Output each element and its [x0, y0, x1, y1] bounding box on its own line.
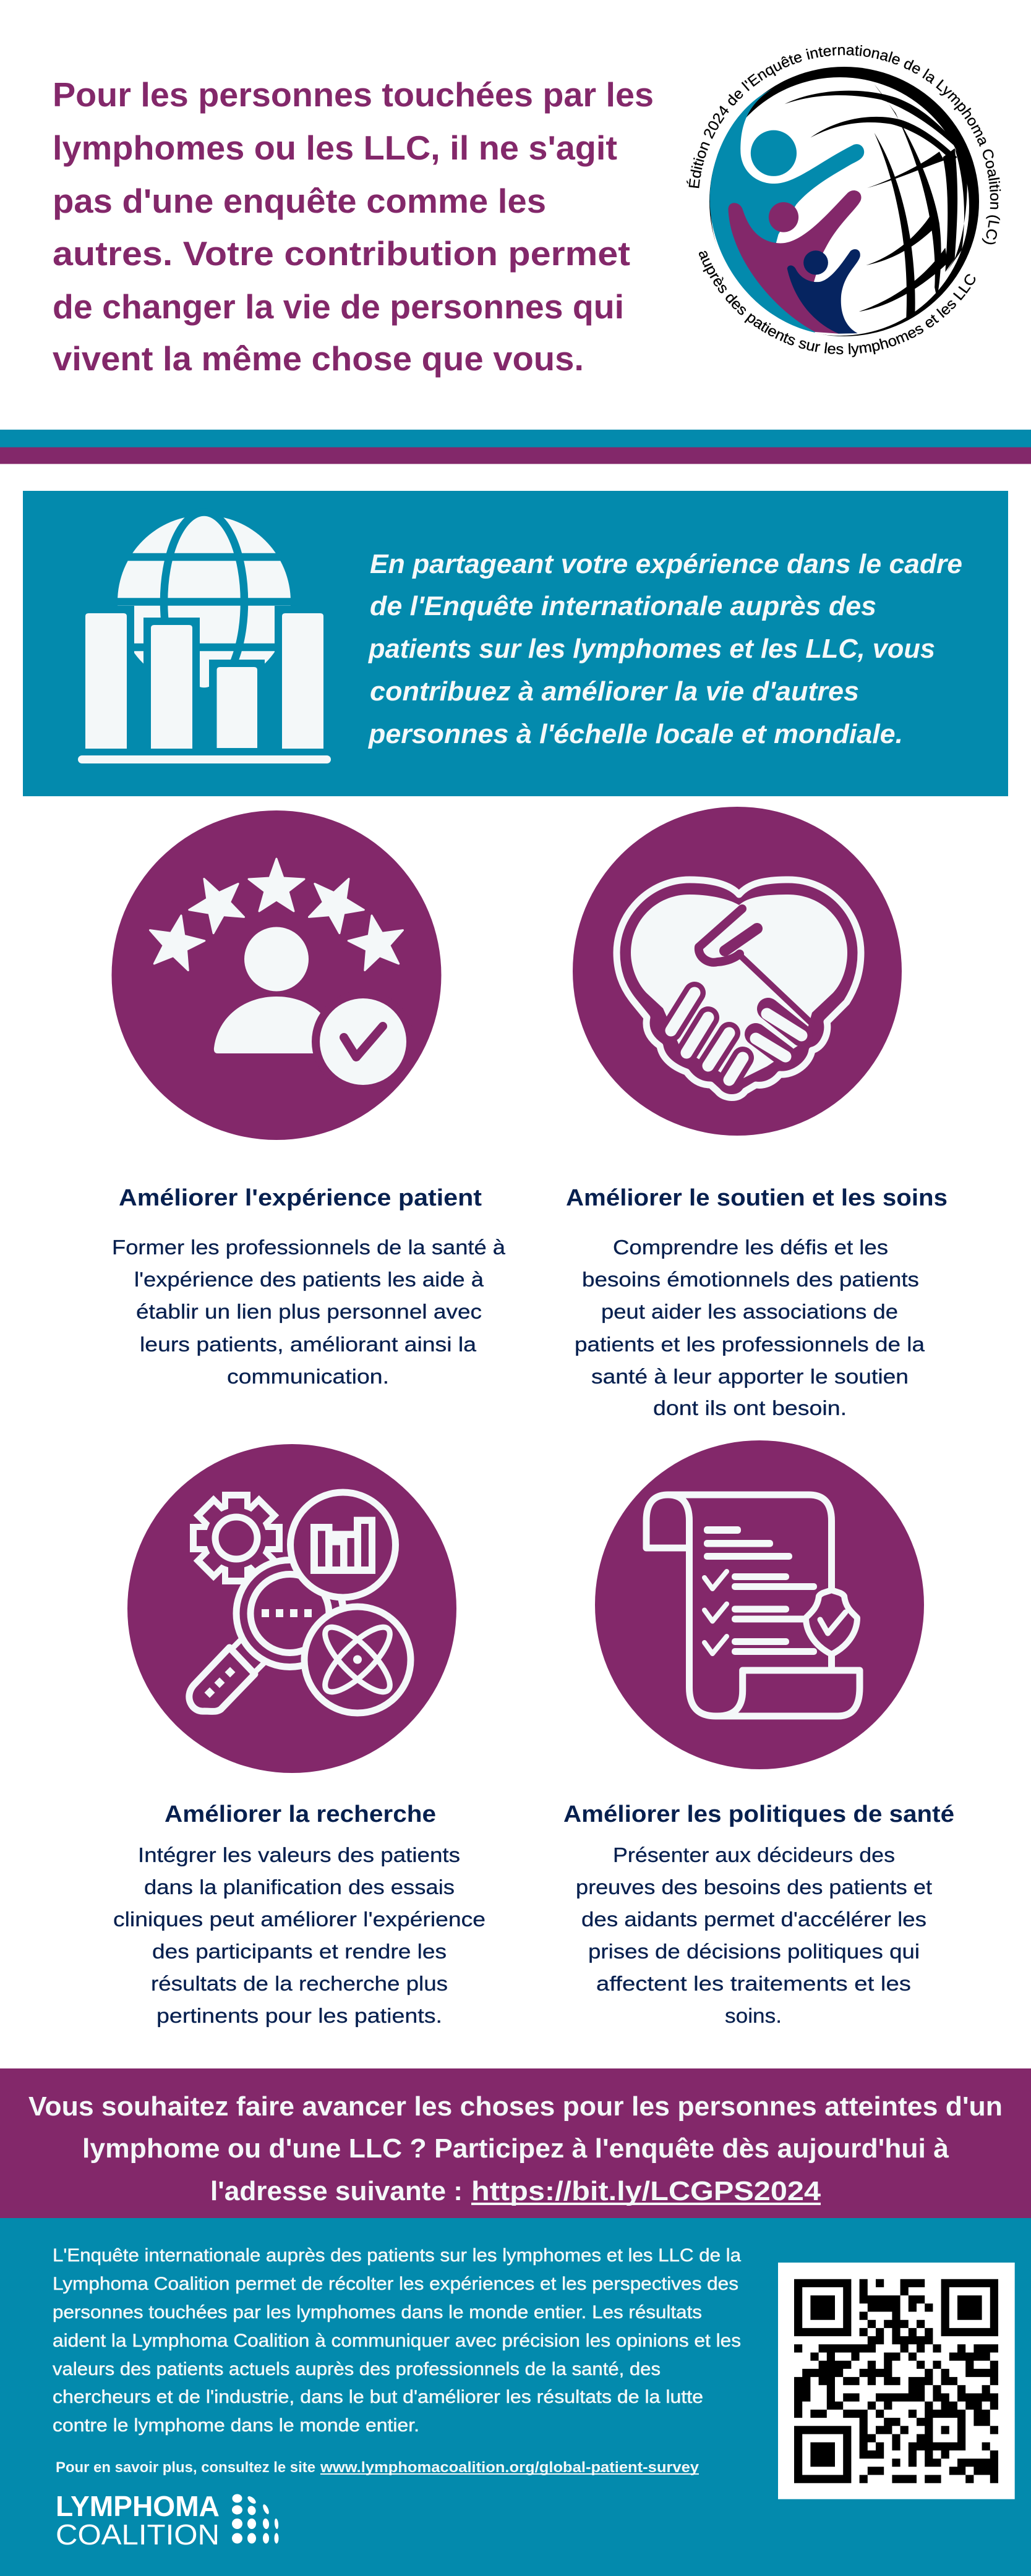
more info link: www.lymphomacoalition.org/global-patient-survey: [320, 2459, 699, 2476]
banner text: patients sur les lymphomes et les LLC, vous: [368, 634, 935, 664]
thumb and hand divider: [699, 909, 811, 1023]
footer text: contre le lymphome dans le monde entier.: [53, 2415, 419, 2436]
icon: globe with bars: [78, 512, 331, 763]
Lymphoma Coalition logo: [56, 2490, 279, 2551]
card text: l'expérience des patients les aide à: [134, 1268, 484, 1291]
icon: research magnifier: [127, 1444, 456, 1773]
badge curved text: Édition 2024 de l'Enquête internationale de la Lymphoma Coalition (LC): [687, 45, 1001, 245]
card text: [575, 1236, 925, 1419]
more info link: Pour en savoir plus, consultez le site: [56, 2459, 315, 2476]
footer text: aident la Lymphoma Coalition à communiquer avec précision les opinions et les: [53, 2331, 741, 2351]
title: Pour les personnes touchées par les: [53, 75, 654, 114]
magnifier: [236, 1560, 343, 1667]
panel: footer: [0, 2218, 1031, 2576]
atom lens: [304, 1607, 411, 1713]
fingers: [671, 993, 802, 1080]
title: de changer la vie de personnes qui: [53, 287, 624, 326]
title: lymphomes ou les LLC, il ne s'agit: [53, 129, 617, 167]
card heading: Améliorer le soutien et les soins: [566, 1185, 948, 1211]
more info link: [56, 2459, 699, 2476]
banner text: En partageant votre expérience dans le cadre: [370, 549, 962, 579]
card text: Former les professionnels de la santé à: [112, 1236, 506, 1259]
footer text: valeurs des patients actuels auprès des professionnels de la santé, des: [53, 2359, 661, 2379]
divider stripes: [0, 430, 1031, 464]
call to action text: Vous souhaitez faire avancer les choses pour les personnes atteintes d'un: [28, 2091, 1003, 2122]
footer text: L'Enquête internationale auprès des patients sur les lymphomes et les LLC de la: [53, 2245, 741, 2266]
card text: leurs patients, améliorant ainsi la: [140, 1333, 477, 1356]
banner text: [368, 549, 962, 749]
footer text: chercheurs et de l'industrie, dans le but d'améliorer les résultats de la lutte: [53, 2387, 703, 2407]
title: [53, 75, 654, 378]
call to action text: [28, 2091, 1003, 2206]
card text: [113, 1843, 486, 2027]
banner text: de l'Enquête internationale auprès des: [370, 591, 876, 621]
card text: affectent les traitements et les: [596, 1972, 911, 1995]
bar chart lens: [291, 1492, 396, 1597]
card text: [112, 1236, 506, 1388]
card text: dans la planification des essais: [144, 1876, 455, 1898]
card text: preuves des besoins des patients et: [576, 1876, 932, 1898]
survey logo badge: [687, 45, 1001, 357]
card text: peut aider les associations de: [601, 1300, 898, 1323]
QR code: [778, 2263, 1015, 2499]
banner text: contribuez à améliorer la vie d'autres: [370, 676, 859, 707]
card text: [576, 1843, 932, 2027]
icon: person with stars: [111, 810, 442, 1140]
card text: communication.: [227, 1365, 389, 1388]
card text: besoins émotionnels des patients: [582, 1268, 919, 1291]
handle: [189, 1647, 255, 1711]
people and globe lines: [710, 84, 967, 334]
card text: dont ils ont besoin.: [653, 1396, 847, 1419]
card text: soins.: [725, 2004, 782, 2027]
call to action text: https://bit.ly/LCGPS2024: [471, 2176, 821, 2206]
Lymphoma Coalition logo: LYMPHOMA: [56, 2490, 220, 2522]
card heading: Améliorer l'expérience patient: [119, 1185, 482, 1211]
icon: policy scroll: [595, 1440, 924, 1769]
card text: santé à leur apporter le soutien: [591, 1365, 909, 1388]
card text: pertinents pour les patients.: [156, 2004, 442, 2027]
footer text: Lymphoma Coalition permet de récolter les expériences et les perspectives des: [53, 2274, 738, 2294]
card text: cliniques peut améliorer l'expérience: [113, 1908, 486, 1931]
title: pas d'une enquête comme les: [53, 182, 546, 220]
title: autres. Votre contribution permet: [53, 234, 630, 273]
title: vivent la même chose que vous.: [53, 339, 584, 378]
call to action text: lymphome ou d'une LLC ? Participez à l'enquête dès aujourd'hui à: [82, 2133, 949, 2164]
card text: prises de décisions politiques qui: [588, 1940, 920, 1963]
footer text: [53, 2245, 741, 2436]
card text: patients et les professionnels de la: [575, 1333, 925, 1356]
card text: Comprendre les défis et les: [613, 1236, 888, 1259]
card heading: Améliorer la recherche: [165, 1801, 436, 1827]
panel: call to action: [0, 2068, 1031, 2218]
card: patient experience: [111, 810, 506, 1388]
badge curved text: auprès des patients sur les lymphomes et les LLC: [699, 251, 976, 357]
badge curved text: [687, 45, 1001, 357]
icon: handshake heart: [573, 807, 902, 1136]
call to action text: l'adresse suivante :: [210, 2176, 463, 2206]
card text: des participants et rendre les: [152, 1940, 447, 1963]
globe ring: [709, 67, 979, 336]
panel: intro banner: [23, 491, 1008, 796]
card text: Présenter aux décideurs des: [613, 1843, 895, 1866]
header panel: [53, 45, 1001, 378]
Lymphoma Coalition logo: COALITION: [56, 2519, 220, 2551]
card heading: Améliorer les politiques de santé: [563, 1801, 954, 1827]
banner text: personnes à l'échelle locale et mondiale.: [368, 719, 903, 749]
card text: établir un lien plus personnel avec: [136, 1300, 482, 1323]
footer text: personnes touchées par les lymphomes dans le monde entier. Les résultats: [53, 2302, 702, 2323]
card text: Intégrer les valeurs des patients: [138, 1843, 460, 1866]
card: support and care: [566, 807, 948, 1419]
card: research: [113, 1444, 486, 2027]
card text: résultats de la recherche plus: [151, 1972, 448, 1995]
card: health policy: [563, 1440, 954, 2027]
gear: [190, 1492, 283, 1584]
card text: des aidants permet d'accélérer les: [581, 1908, 926, 1931]
